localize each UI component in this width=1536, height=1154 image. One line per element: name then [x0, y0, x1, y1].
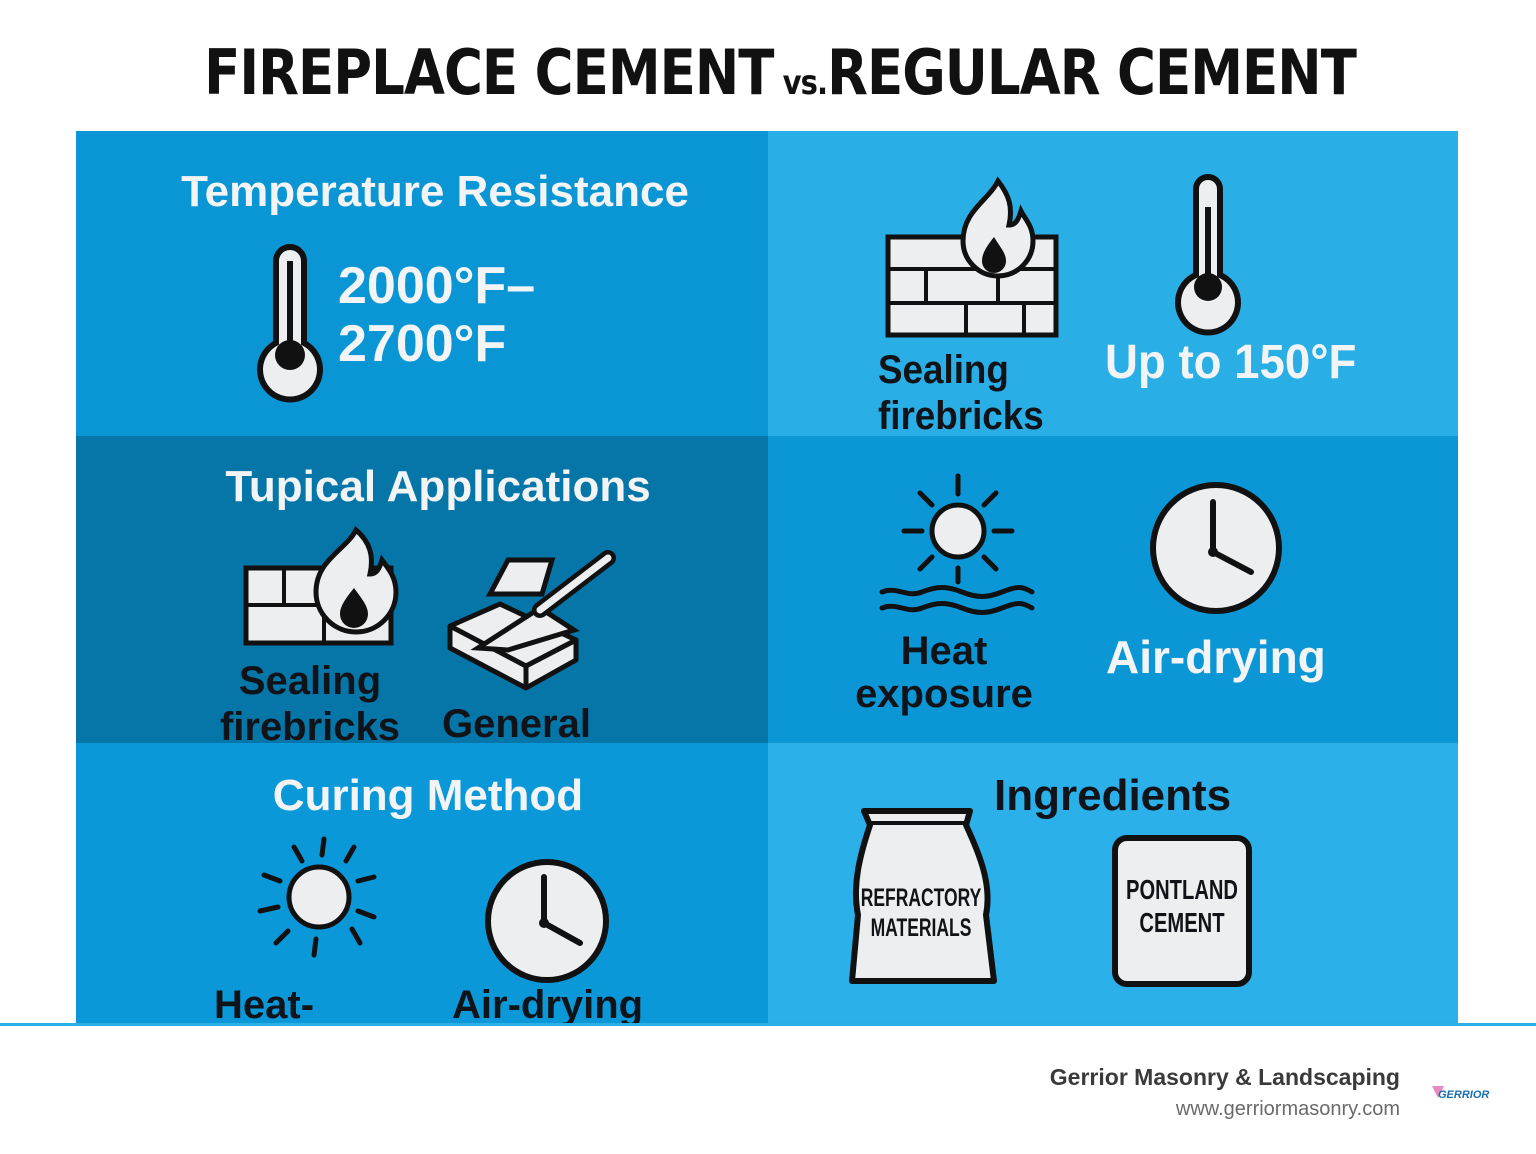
label: pontland cement: PONTLAND — [1126, 874, 1238, 905]
icon: thermometer — [257, 244, 323, 402]
panel: temperature resistance regular — [768, 131, 1458, 436]
label: heat exposure: Heat — [901, 629, 987, 673]
icon: firebrick wall with flame — [244, 526, 398, 646]
icon: trowel and brick — [448, 550, 616, 690]
label: sealing firebricks: Sealing — [239, 659, 381, 703]
heading: curing method: Curing Method — [273, 771, 583, 820]
label: air-drying: Air-drying — [1106, 631, 1326, 683]
label: heat exposure: exposure — [855, 672, 1033, 716]
panel: curing method regular — [768, 436, 1458, 743]
label: pontland cement — [1126, 874, 1238, 938]
panel: typical applications fireplace — [76, 436, 768, 743]
footer: website: www.gerriormasonry.com — [1176, 1098, 1400, 1120]
icon: clock — [485, 859, 609, 983]
divider line — [0, 1023, 1536, 1026]
label: refractory materials: MATERIALS — [871, 914, 971, 942]
heading: ingredients: Ingredients — [994, 771, 1231, 820]
label: sealing firebricks — [220, 659, 400, 743]
logo: GERRIOR — [1438, 1089, 1489, 1101]
label: sealing firebricks — [878, 348, 1044, 436]
icon: box portland cement — [1112, 835, 1252, 987]
text: up to 150F: Up to 150°F — [1105, 336, 1356, 389]
footer: company name: Gerrior Masonry & Landscaping — [1050, 1064, 1400, 1090]
text: 2000F-2700F: 2000°F– — [338, 257, 535, 315]
icon: firebrick wall with flame — [886, 176, 1058, 338]
label: sealing firebricks: Sealing — [878, 348, 1009, 392]
label: heat exposure — [855, 629, 1033, 716]
heading: typical applications: Tupical Applications — [225, 462, 651, 511]
icon: sun — [258, 836, 376, 958]
icon: bag refractory materials — [849, 808, 997, 984]
icon: sun with heat waves — [880, 474, 1034, 615]
panel: temperature resistance fireplace — [76, 131, 768, 436]
panel: ingredients — [768, 743, 1458, 1025]
text: 2000F-2700F: 2700°F — [338, 315, 506, 373]
icon: clock — [1150, 482, 1282, 614]
label: pontland cement: CEMENT — [1139, 907, 1225, 938]
label: refractory materials — [861, 884, 981, 942]
title: FIREPLACE CEMENT vs.REGULAR CEMENT — [204, 36, 1356, 109]
icon: thermometer small — [1175, 174, 1241, 336]
heading: temperature resistance: Temperature Resistance — [181, 167, 689, 216]
label: refractory materials: REFRACTORY — [861, 884, 981, 912]
panel: curing method fireplace — [76, 743, 768, 1025]
text: 2000F-2700F — [338, 257, 535, 373]
